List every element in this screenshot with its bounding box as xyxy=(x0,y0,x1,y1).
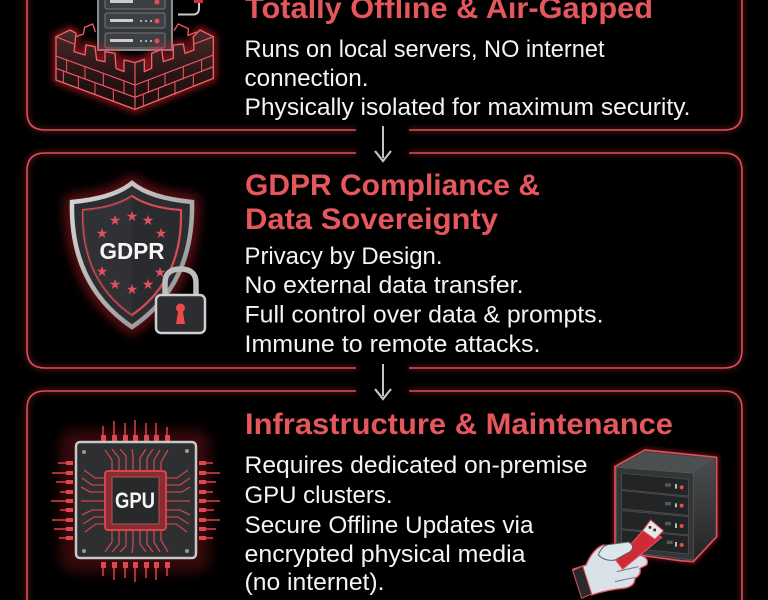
text: infrastructure description xyxy=(244,452,588,596)
text: infrastructure description: Requires dedicated on-premise xyxy=(244,452,588,479)
icon: GDPR shield and padlock: ★ xyxy=(126,281,138,297)
icon: server in brick firewall xyxy=(56,0,213,109)
text: GDPR description: Full control over data & prompts. xyxy=(244,302,604,328)
icon: GDPR shield and padlock: ★ xyxy=(155,225,167,241)
text: infrastructure description: encrypted physical media xyxy=(244,541,526,568)
icon: GDPR shield and padlock xyxy=(72,183,205,333)
text: GDPR description: Immune to remote attacks. xyxy=(244,331,540,358)
heading: GDPR compliance: GDPR Compliance & xyxy=(245,169,540,202)
icon: GDPR shield and padlock: ★ xyxy=(142,212,154,228)
text: GDPR description xyxy=(244,243,604,358)
icon: GPU chip xyxy=(51,420,220,582)
panel: infrastructure and maintenance xyxy=(27,391,742,600)
icon: GDPR shield and padlock: ★ xyxy=(109,212,121,228)
heading: infrastructure: Infrastructure & Maintenance xyxy=(245,408,673,441)
icon: GDPR shield and padlock: ★ xyxy=(126,208,138,224)
text: offline description xyxy=(244,36,690,121)
text: infrastructure description: (no internet). xyxy=(244,569,384,596)
icon: GDPR shield and padlock: ★ xyxy=(109,276,121,292)
text: GDPR description: No external data transfer. xyxy=(244,272,524,299)
text: GDPR description: Privacy by Design. xyxy=(244,243,442,270)
arrow: second to third panel xyxy=(375,364,391,399)
icon: GDPR shield and padlock: ★ xyxy=(154,264,166,280)
text: infrastructure description: GPU clusters. xyxy=(244,482,392,509)
arrow: first to second panel xyxy=(375,126,391,161)
text: offline description: Runs on local servers, NO internet xyxy=(244,36,605,63)
icon: GDPR shield and padlock: ★ xyxy=(96,263,108,279)
icon: GDPR shield and padlock: ★ xyxy=(96,225,108,241)
icon: GPU chip: GPU xyxy=(115,488,155,513)
icon: GDPR shield and padlock: GDPR xyxy=(100,238,165,264)
text: offline description: Physically isolated for maximum security. xyxy=(244,94,690,121)
panel: totally offline and air-gapped xyxy=(27,0,742,130)
text: infrastructure description: Secure Offline Updates via xyxy=(244,512,534,539)
text: offline description: connection. xyxy=(244,65,368,92)
icon: GDPR shield and padlock: ★ xyxy=(142,276,154,292)
heading: GDPR compliance: Data Sovereignty xyxy=(245,203,498,236)
icon: server with USB drive and hand xyxy=(573,450,717,598)
heading: GDPR compliance xyxy=(245,169,540,236)
panel: GDPR compliance and data sovereignty xyxy=(27,153,742,368)
